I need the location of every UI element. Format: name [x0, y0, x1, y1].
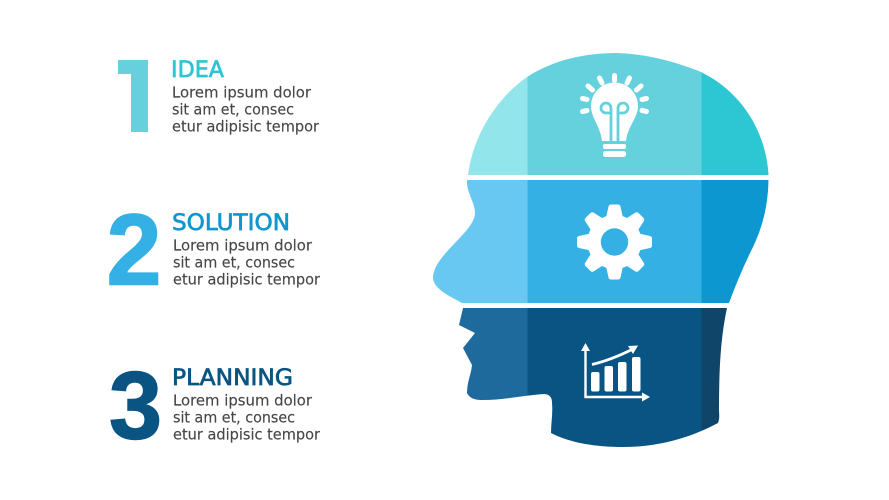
- head diagram: [430, 45, 772, 450]
- heading: solution: SOLUTION: [172, 210, 290, 236]
- text block: solution: sit am et, consec: [173, 254, 295, 272]
- numeral 2: 2: [106, 194, 162, 306]
- numeral 1: 1: [105, 39, 162, 154]
- text block: solution: Lorem ipsum dolor: [173, 236, 313, 254]
- panel: head top section: [468, 53, 768, 175]
- item 1: idea: [118, 60, 320, 135]
- text block: planning: etur adipisic tempor: [173, 426, 321, 444]
- panel: head middle section: [430, 175, 772, 305]
- icon: light bulb: [582, 76, 646, 157]
- item 3: planning: [109, 352, 321, 460]
- heading: idea: IDEA: [171, 57, 225, 83]
- numeral 3: 3: [109, 352, 162, 460]
- icon: gear: [577, 204, 652, 280]
- text block: planning: sit am et, consec: [173, 408, 295, 426]
- text block: idea: [172, 84, 320, 136]
- text block: planning: Lorem ipsum dolor: [173, 392, 313, 410]
- numeral 1: [118, 60, 148, 132]
- text block: idea: sit am et, consec: [172, 100, 294, 118]
- icon: bar chart: [581, 343, 650, 402]
- text block: solution: [173, 236, 321, 288]
- panel: head bottom section: [455, 305, 732, 450]
- item 2: solution: [106, 194, 321, 306]
- text block: idea: Lorem ipsum dolor: [172, 84, 312, 102]
- text block: idea: etur adipisic tempor: [172, 118, 320, 136]
- text block: planning: [173, 392, 321, 444]
- text block: solution: etur adipisic tempor: [173, 270, 321, 288]
- heading: planning: PLANNING: [172, 365, 293, 391]
